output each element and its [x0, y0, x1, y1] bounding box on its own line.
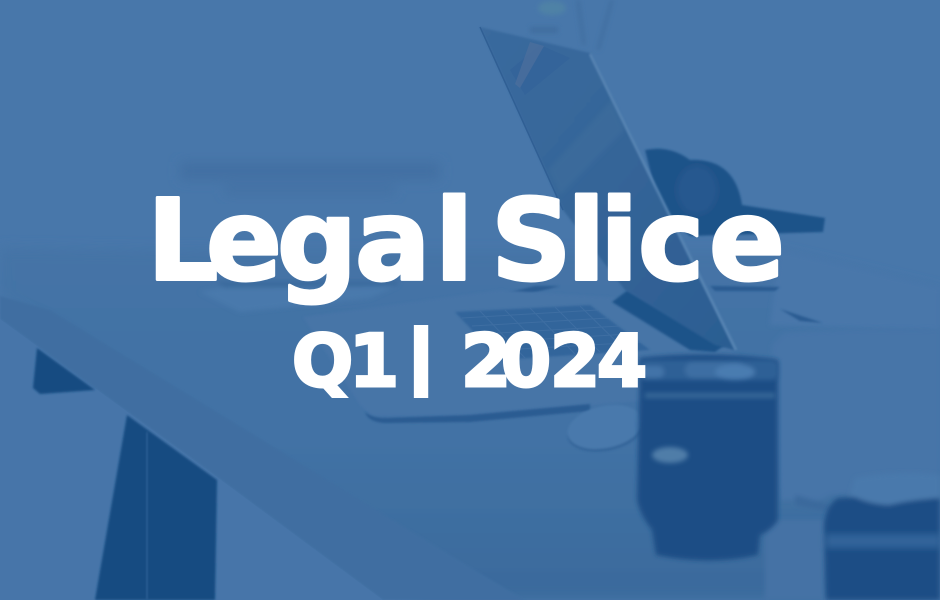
- desk slivers by laptop: [495, 286, 823, 323]
- headphones: [645, 149, 825, 236]
- subtitle: Q1 | 2024: Q1 | 2024: [292, 318, 647, 403]
- desk front light floor: [0, 319, 383, 600]
- desk left leg: [33, 348, 95, 394]
- mouse: [570, 410, 636, 452]
- desk top: [363, 500, 831, 599]
- title: Legal Slice: Legal Slice: [147, 176, 785, 306]
- white mug at right: [766, 568, 823, 596]
- laptop base shadow: [365, 404, 590, 423]
- laptop base: [496, 291, 536, 298]
- desk right back surface: [770, 250, 940, 330]
- keyboard: [455, 305, 650, 360]
- laptop screen: [480, 27, 736, 350]
- laptop hinge: [612, 290, 725, 352]
- back desk objects: [180, 162, 440, 194]
- cup rim highlights: [640, 360, 778, 463]
- plant at top: [533, 3, 564, 31]
- desk main leg: [95, 415, 217, 600]
- dark cup: [637, 354, 778, 560]
- small cup bottom right: [822, 492, 940, 600]
- phone on desk: [222, 282, 371, 286]
- desk edge band: [1, 300, 403, 598]
